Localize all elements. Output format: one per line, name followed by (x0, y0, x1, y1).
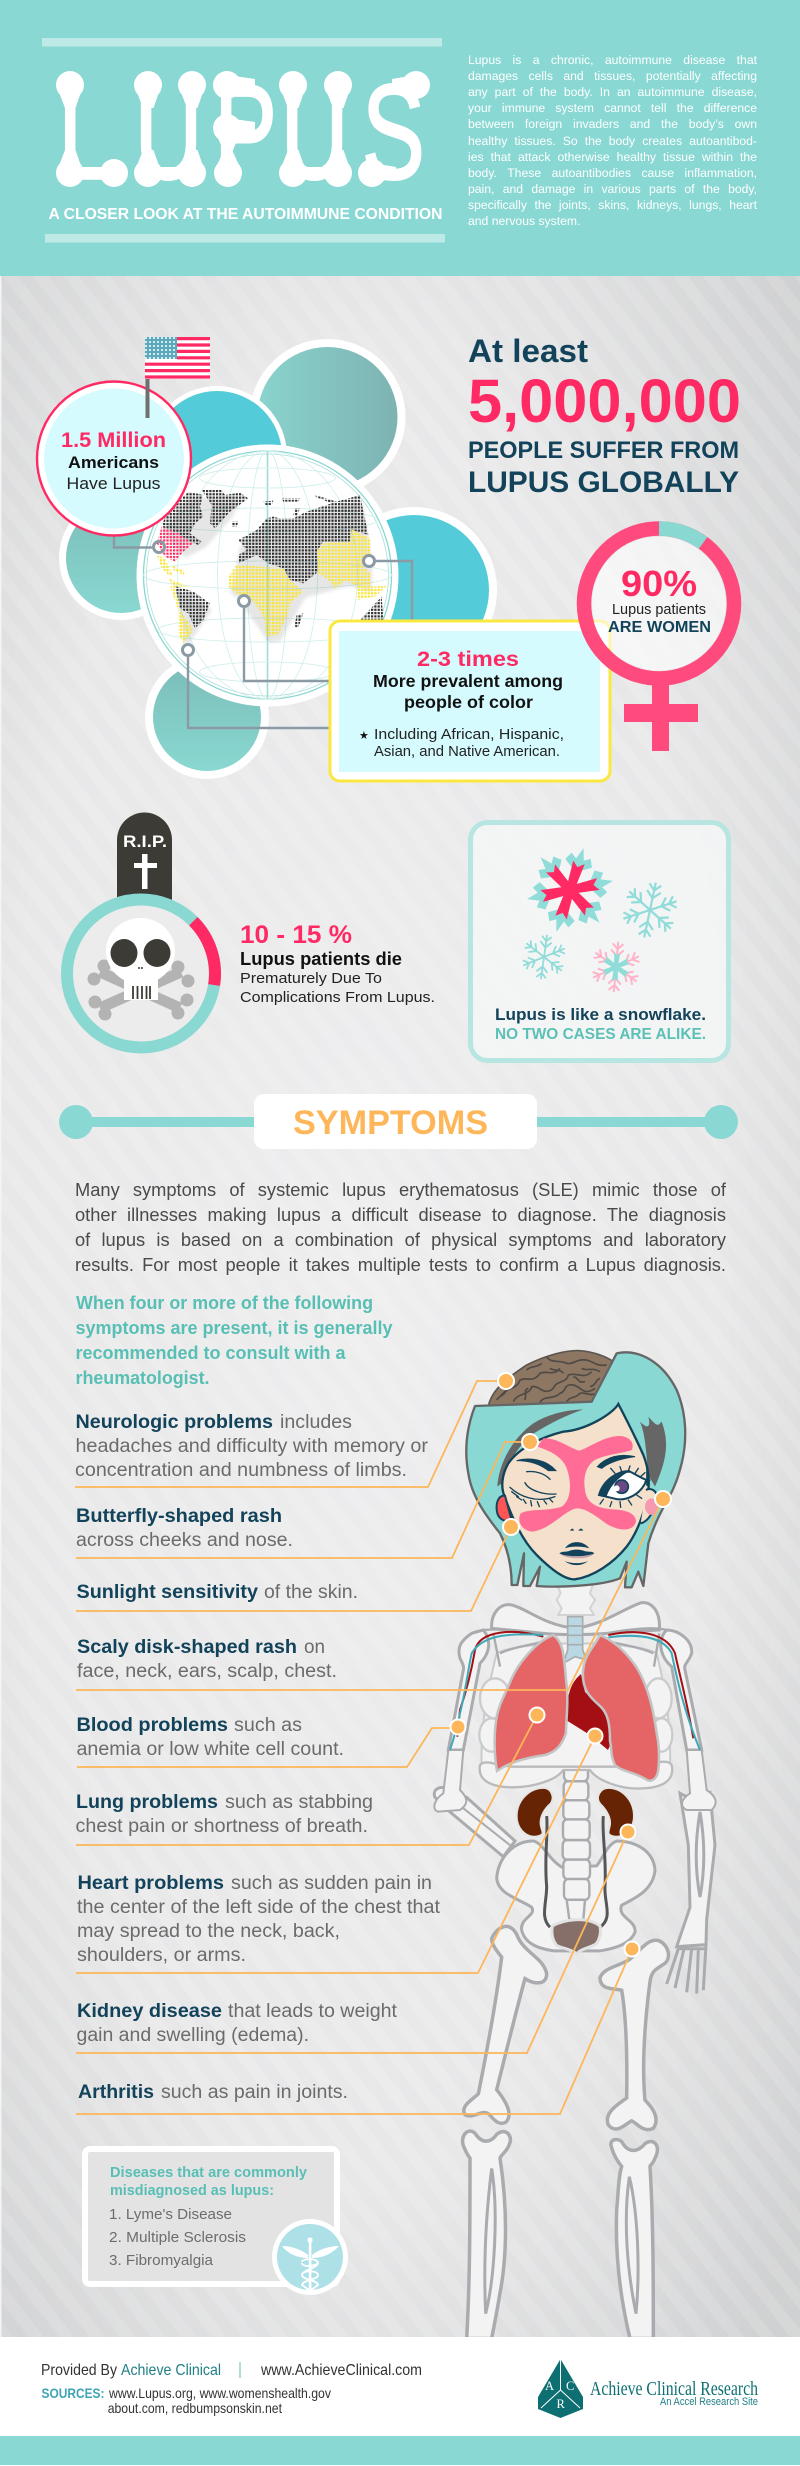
credit line (41, 2362, 422, 2379)
female symbol: 90% women: 90% (621, 563, 697, 604)
callout: 2-3 times more prevalent: people of color (404, 692, 533, 712)
text: consult recommendation: symptoms are present, it is generally (76, 1318, 392, 1338)
icon: brain (488, 1351, 613, 1406)
progress ring (67, 900, 215, 1048)
callout: 2-3 times more prevalent: 2-3 times (417, 648, 519, 671)
left femur (464, 1926, 547, 2123)
callout: 2-3 times more prevalent: ★ (359, 729, 369, 742)
callout: 1.5 million Americans (37, 337, 210, 536)
symptom: heart problems: may spread to the neck, back, (77, 1921, 340, 1942)
symptom: sunlight sensitivity (76, 1582, 358, 1603)
text: consult recommendation: recommended to consult with a (76, 1343, 346, 1363)
text: lupus description: and nervous system. (468, 214, 580, 228)
symptom: sunlight sensitivity: of the skin. (264, 1582, 358, 1603)
callout: 1.5 million Americans: 1.5 Million (61, 429, 166, 452)
text: lupus description: healthy tissues. So the body creates autoantibod- (468, 134, 757, 148)
female symbol: 90% women: Lupus patients (612, 602, 706, 618)
credit line: www.AchieveClinical.com (260, 2362, 422, 2379)
symptom: heart problems: such as sudden pain in (231, 1873, 432, 1894)
symptom: butterfly rash (76, 1506, 293, 1551)
sources: www.Lupus.org, www.womenshealth.gov (108, 2385, 331, 2401)
symptom: arthritis: Arthritis (78, 2082, 154, 2103)
icon: pink snowflake (589, 940, 643, 994)
butterfly rash (519, 1436, 636, 1532)
upper skeleton (434, 1580, 716, 1812)
text: mortality statistic: Lupus patients die (240, 949, 402, 969)
subtitle: A CLOSER LOOK AT THE AUTOIMMUNE CONDITION (48, 206, 442, 223)
headline: 5,000,000 people (468, 333, 741, 499)
credit line: Provided By (41, 2362, 117, 2379)
sources: about.com, redbumpsonskin.net (108, 2400, 282, 2416)
heart (566, 1674, 612, 1750)
right femur (600, 1940, 668, 2130)
text: consult recommendation: When four or more of the following (76, 1293, 373, 1313)
icon: large snowflake (514, 834, 626, 946)
symptom: butterfly rash: Butterfly-shaped rash (76, 1506, 282, 1527)
icon: tombstone (117, 812, 172, 900)
text: mortality statistic (240, 921, 435, 1006)
icon: US flag (145, 337, 210, 418)
symptom: neurologic problems (75, 1412, 429, 1481)
logo: Achieve Clinical Research (538, 2359, 758, 2418)
right tibia (611, 2139, 657, 2338)
symptom: sunlight sensitivity: Sunlight sensitivity (76, 1582, 258, 1603)
symptom: kidney disease: gain and swelling (edema). (76, 2025, 309, 2046)
text: symptoms introduction (75, 1179, 726, 1275)
circle: teal bottom (145, 655, 269, 779)
circle: cyan right (331, 507, 497, 673)
text: symptoms introduction: other illnesses making lupus a difficult disease to diagnose. The diagnosis (75, 1204, 726, 1225)
left forearm (434, 1788, 515, 1857)
map shadow (164, 498, 372, 649)
callout lines from symptoms to body (75, 1381, 663, 2114)
text: lupus description: specifically the joints, skins, kidneys, lungs, heart (468, 198, 757, 212)
callout dots on body (450, 1373, 671, 1956)
symptom: heart problems (77, 1873, 441, 1966)
symptom: heart problems: shoulders, or arms. (77, 1945, 246, 1966)
callout: 2-3 times more prevalent (330, 621, 610, 781)
symptom: blood problems: Blood problems (76, 1715, 228, 1736)
text: lupus description: Lupus is a chronic, autoimmune disease that (468, 53, 757, 67)
header panel (0, 0, 800, 276)
symptom: arthritis: such as pain in joints. (161, 2082, 348, 2103)
headline: 5,000,000 people: At least (468, 333, 588, 369)
symptom: scaly rash: Scaly disk-shaped rash (77, 1637, 297, 1658)
eyes and brows (510, 1455, 650, 1507)
trachea (563, 1617, 587, 1663)
vessels: arteries and veins (450, 1632, 700, 1750)
text: lupus description (468, 53, 757, 228)
symptom: blood problems: such as (234, 1715, 302, 1736)
title: LUPUS: LUPUS (58, 57, 425, 207)
logo: Achieve Clinical Research: Achieve Clinical Research (590, 2378, 758, 2400)
symptom: kidney disease: Kidney disease (77, 2001, 222, 2022)
globe with surrounding circles (59, 339, 497, 779)
text: symptoms introduction: results. For most people it takes multiple tests to confirm a Lupus diagnosis. (75, 1254, 726, 1275)
right hand (667, 1945, 706, 1994)
female symbol: 90% women (584, 528, 734, 751)
callout: 1.5 million Americans: Americans (68, 453, 159, 472)
icon: tombstone: R.I.P. (123, 833, 167, 851)
icon: tombstone and skull ring (67, 812, 215, 1048)
face (502, 1404, 649, 1579)
bladder (552, 1920, 600, 1954)
symptom: neurologic problems: headaches and difficulty with memory or (76, 1436, 429, 1457)
text: mortality statistic: Complications From Lupus. (240, 989, 435, 1006)
text: lupus description: pain, and damage in various parts of the body, (468, 182, 757, 196)
ears (497, 1489, 658, 1523)
symptom: neurologic problems: includes (280, 1412, 352, 1433)
collar bones (492, 1603, 659, 1635)
symptom: heart problems: the center of the left side of the chest that (77, 1897, 441, 1918)
text: lupus description: damages cells and tissues, potentially affecting (468, 69, 757, 83)
circle: big teal (250, 339, 406, 495)
panel: snowflake: Lupus is like a snowflake. (495, 1005, 706, 1024)
icon: crossbones (88, 960, 194, 1020)
headline: 5,000,000 people: LUPUS GLOBALLY (468, 466, 739, 499)
icon: teal snowflake (617, 877, 683, 943)
lips (559, 1542, 594, 1565)
location markers (154, 542, 374, 656)
panel: commonly misdiagnosed diseases: Diseases that are commonly (110, 2165, 307, 2181)
logo: Achieve Clinical Research: R (556, 2397, 566, 2411)
dotted world map (157, 490, 387, 643)
callout: 1.5 million Americans: Have Lupus (66, 474, 160, 493)
female symbol: 90% women: ARE WOMEN (608, 619, 711, 636)
spine (563, 1746, 590, 1920)
logo: Achieve Clinical Research: An Accel Research Site (660, 2396, 758, 2408)
ureters (544, 1816, 607, 1927)
panel: commonly misdiagnosed diseases: 2. Multiple Sclerosis (109, 2229, 246, 2246)
circle: cyan upper left (147, 386, 287, 526)
left tibia (463, 2131, 510, 2338)
nose (570, 1529, 583, 1531)
callout: 2-3 times more prevalent: Including African, Hispanic, (374, 727, 564, 743)
symptom: scaly rash (77, 1637, 337, 1682)
headline: 5,000,000 people: PEOPLE SUFFER FROM (468, 437, 739, 464)
heading: symptoms (59, 1094, 738, 1149)
figure: head (466, 1351, 685, 1587)
symptom: arthritis (78, 2082, 348, 2103)
callout: 2-3 times more prevalent: More prevalent among (373, 671, 563, 691)
heading: symptoms: SYMPTOMS (293, 1104, 488, 1142)
symptom: neurologic problems: Neurologic problems (76, 1412, 273, 1433)
symptom: lung problems: such as stabbing (225, 1792, 373, 1813)
text: symptoms introduction: of lupus is based on a combination of physical symptoms and laboratory (75, 1229, 726, 1250)
symptom: kidney disease: that leads to weight (228, 2001, 398, 2022)
logo: Achieve Clinical Research: C (566, 2379, 574, 2393)
symptom: lung problems: Lung problems (76, 1792, 218, 1813)
credit line: Achieve Clinical (121, 2362, 221, 2379)
symptom: lung problems (76, 1792, 373, 1837)
neck vertebrae (557, 1580, 595, 1615)
rib cage (481, 1643, 670, 1767)
symptom: scaly rash: face, neck, ears, scalp, chest. (77, 1661, 337, 1682)
icon: caduceus (272, 2219, 348, 2295)
symptom: lung problems: chest pain or shortness of breath. (76, 1816, 368, 1837)
text: lupus description: between foreign invaders and the body’s own (468, 117, 757, 131)
text: mortality statistic: Prematurely Due To (240, 970, 382, 987)
sources (42, 2385, 331, 2416)
lung: left (495, 1635, 567, 1771)
panel: snowflake (470, 822, 728, 1060)
figure: skeleton (434, 1580, 716, 2338)
panel: commonly misdiagnosed diseases: 3. Fibromyalgia (109, 2252, 214, 2269)
text: lupus description: any part of the body. In an autoimmune disease, (468, 85, 757, 99)
footer panel (0, 2337, 800, 2436)
text: symptoms introduction: Many symptoms of systemic lupus erythematosus (SLE) mimic those of (75, 1179, 726, 1200)
text: lupus description: ies that attack otherwise healthy tissue within the (468, 150, 757, 164)
dark hair strands (497, 1409, 666, 1487)
text: consult recommendation: rheumatologist. (76, 1368, 210, 1388)
hair (466, 1352, 685, 1587)
symptom: blood problems (76, 1715, 344, 1760)
right forearm (677, 1793, 715, 1947)
symptom: kidney disease (76, 2001, 398, 2046)
text: lupus description: your immune system cannot tell the difference (468, 101, 757, 115)
arm vessels (450, 1700, 701, 1785)
symptom: blood problems: anemia or low white cell count. (76, 1739, 344, 1760)
text: lupus description: body. These autoantibodies cause inflammation, (468, 166, 757, 180)
symptom: neurologic problems: concentration and numbness of limbs. (75, 1460, 407, 1481)
logo: Achieve Clinical Research: A (545, 2379, 554, 2393)
symptom: heart problems: Heart problems (78, 1873, 224, 1894)
kidney: right (598, 1788, 634, 1837)
panel: commonly misdiagnosed diseases: 1. Lyme's Disease (109, 2206, 232, 2223)
symptom: butterfly rash: across cheeks and nose. (76, 1530, 293, 1551)
panel: snowflake: NO TWO CASES ARE ALIKE. (495, 1026, 706, 1043)
pelvis (497, 1841, 655, 1951)
right arm (661, 1630, 702, 1750)
circle: teal left (59, 496, 183, 620)
text: mortality statistic: 10 - 15 % (240, 921, 352, 949)
lower skeleton (434, 1700, 715, 2338)
text: consult recommendation (76, 1293, 392, 1388)
icon: skull (106, 918, 175, 1000)
globe (114, 444, 412, 728)
kidney: left (517, 1788, 553, 1837)
lung: right (583, 1635, 659, 1781)
connector lines (114, 536, 412, 728)
symptom: scaly rash: on (304, 1637, 325, 1658)
icon: small teal snowflake (519, 932, 569, 982)
headline: 5,000,000 people: 5,000,000 (468, 367, 741, 435)
panel: commonly misdiagnosed diseases: misdiagnosed as lupus: (110, 2183, 274, 2199)
panel: commonly misdiagnosed diseases (85, 2149, 348, 2295)
sources: SOURCES: (42, 2385, 104, 2401)
footer teal bar (0, 2436, 800, 2465)
left arm (448, 1630, 489, 1750)
callout: 2-3 times more prevalent: Asian, and Native American. (374, 744, 560, 760)
